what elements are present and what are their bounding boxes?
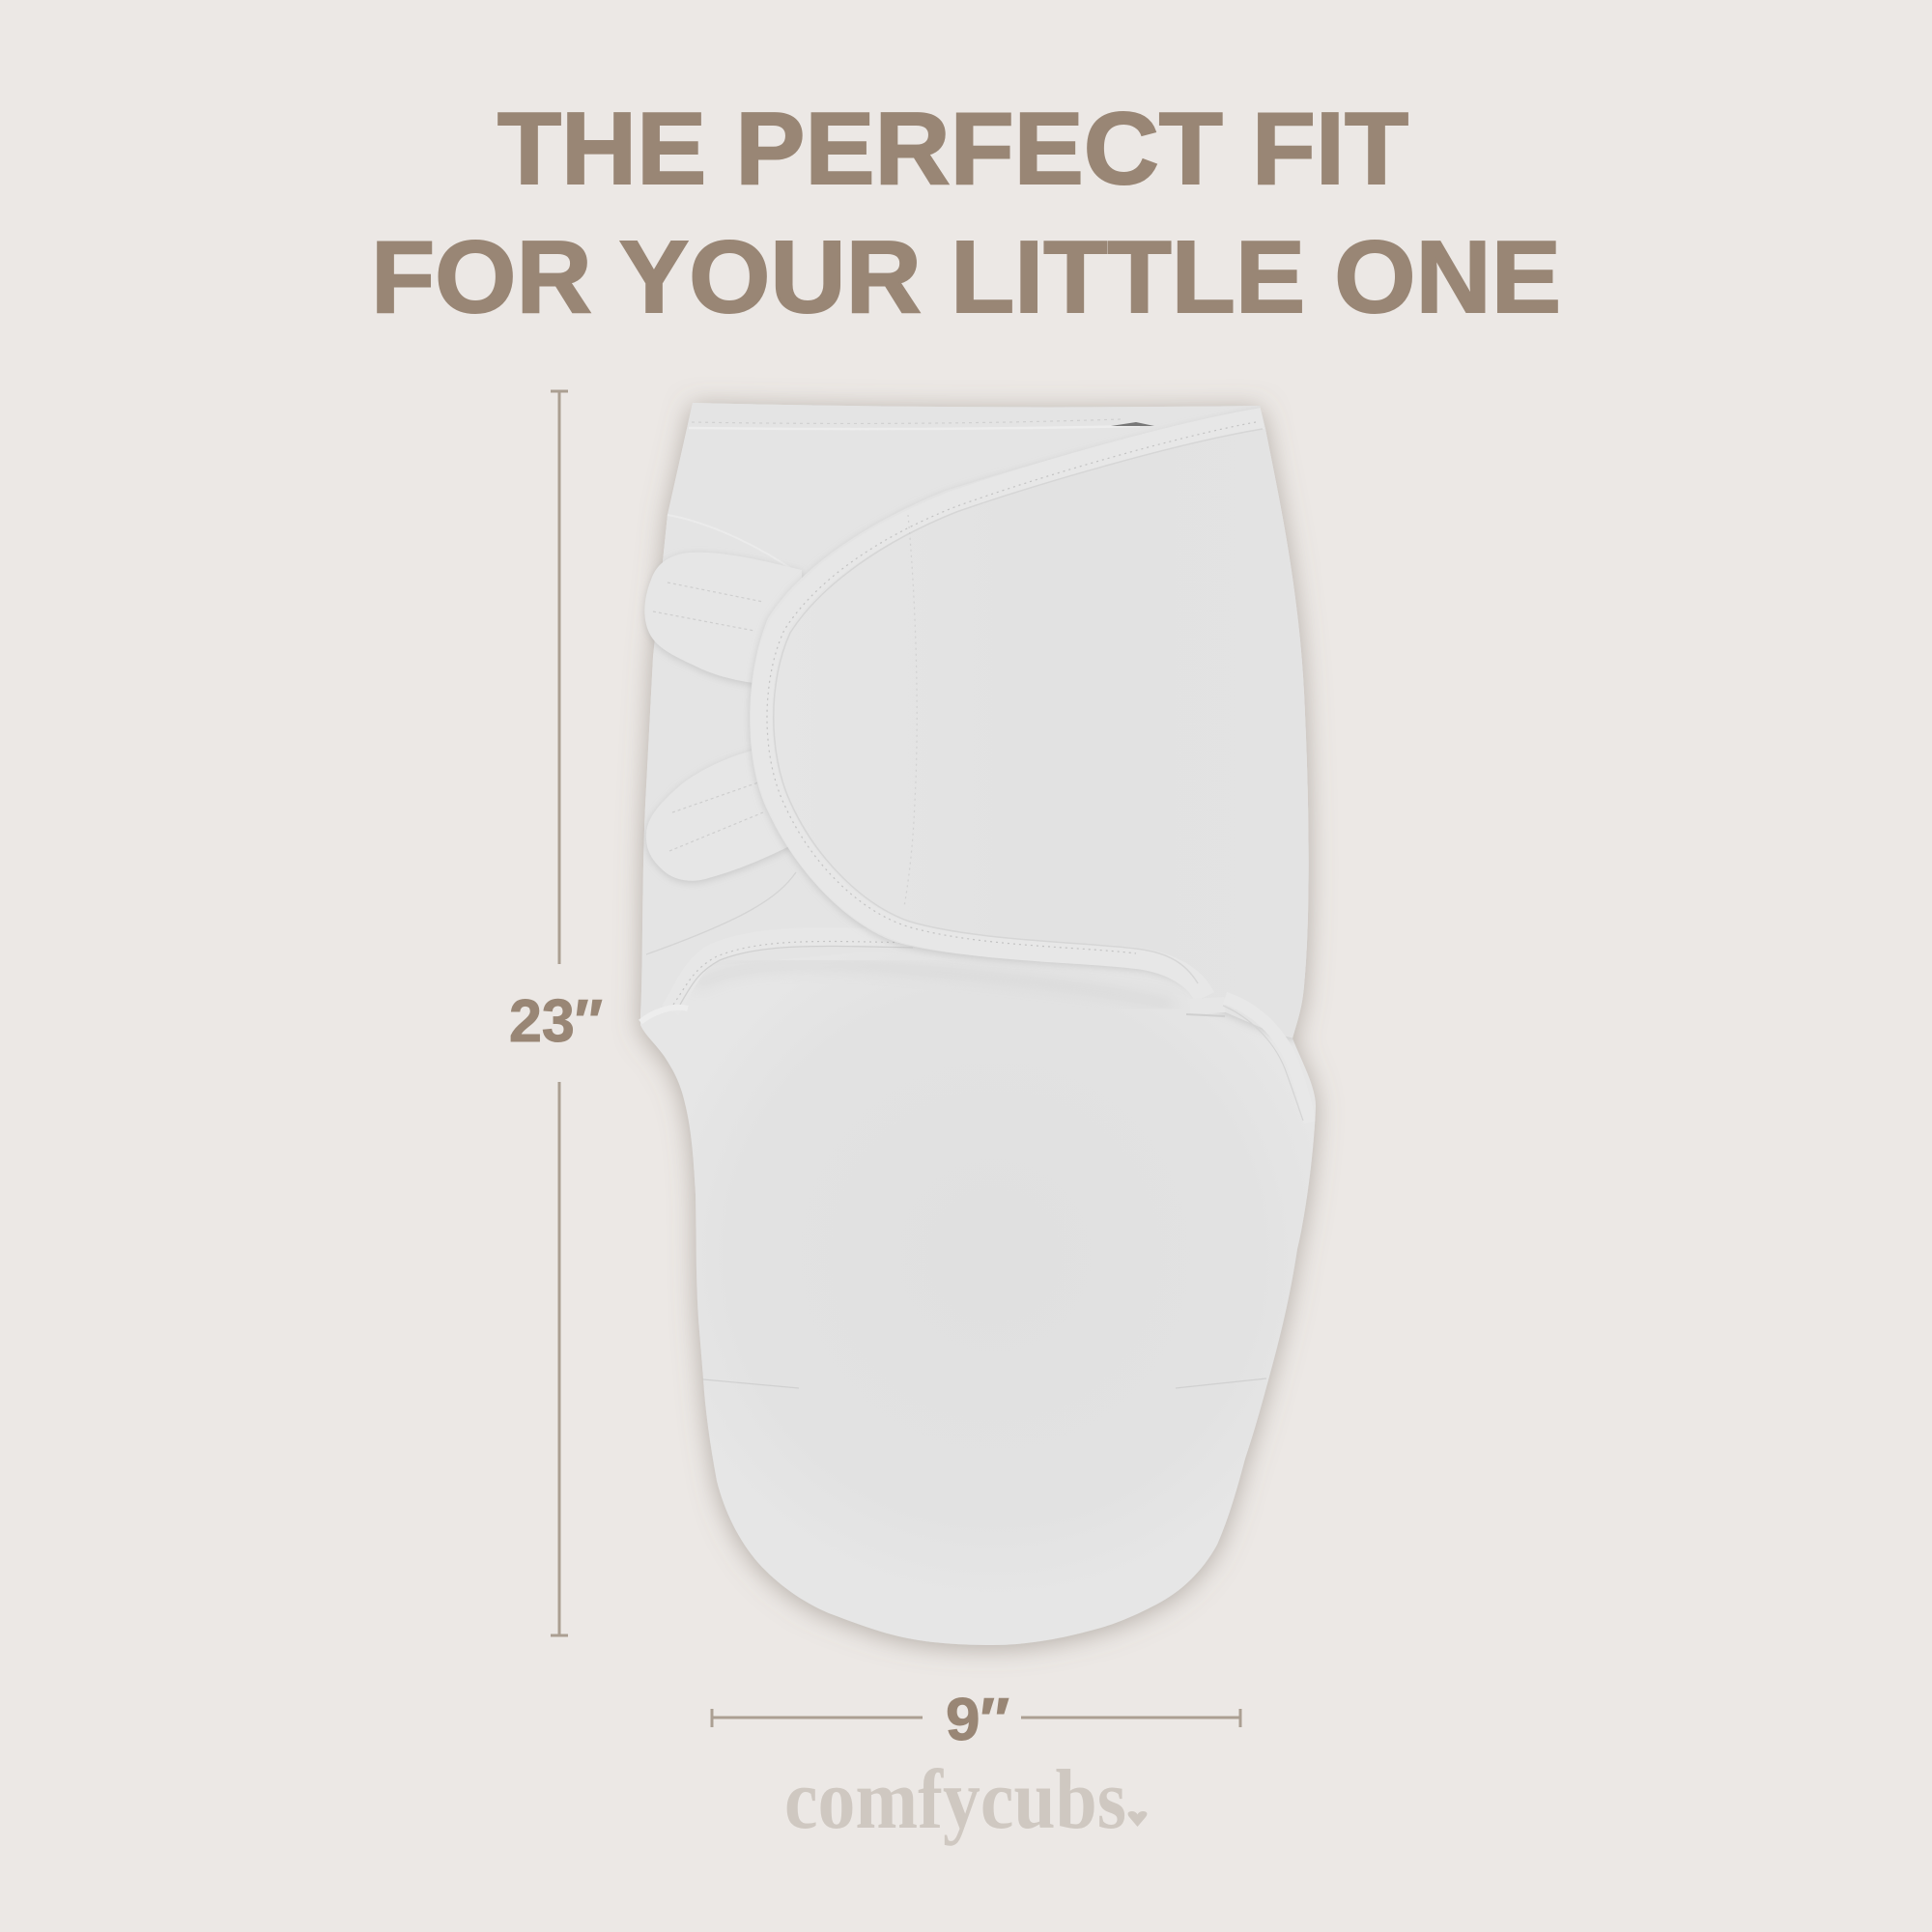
flap edge binding xyxy=(982,411,1244,999)
icon: heart xyxy=(1128,1811,1147,1827)
right side binding xyxy=(1186,998,1310,1122)
height dimension line xyxy=(551,391,568,1635)
top band seam xyxy=(689,419,1154,429)
swaddle product illustration xyxy=(640,403,1333,1645)
lower pocket opening xyxy=(640,937,1174,1022)
fastening tab upper xyxy=(644,553,802,685)
title: THE PERFECT FIT xyxy=(497,92,1408,206)
swaddle body xyxy=(640,403,1316,1645)
upper back panel xyxy=(640,403,1306,1038)
strap upper xyxy=(657,515,796,628)
logo: comfycubs xyxy=(784,1753,1126,1847)
flap centre stitch xyxy=(904,515,917,907)
wrap flap xyxy=(750,408,1333,1038)
foot seams xyxy=(703,1378,1266,1388)
fastening tab lower xyxy=(646,748,797,881)
height label: 23″ xyxy=(509,988,603,1055)
title xyxy=(371,92,1561,334)
strap lower xyxy=(646,872,796,954)
width label: 9″ xyxy=(946,1687,1009,1753)
title: FOR YOUR LITTLE ONE xyxy=(371,220,1561,334)
width dimension line xyxy=(712,1709,1240,1727)
